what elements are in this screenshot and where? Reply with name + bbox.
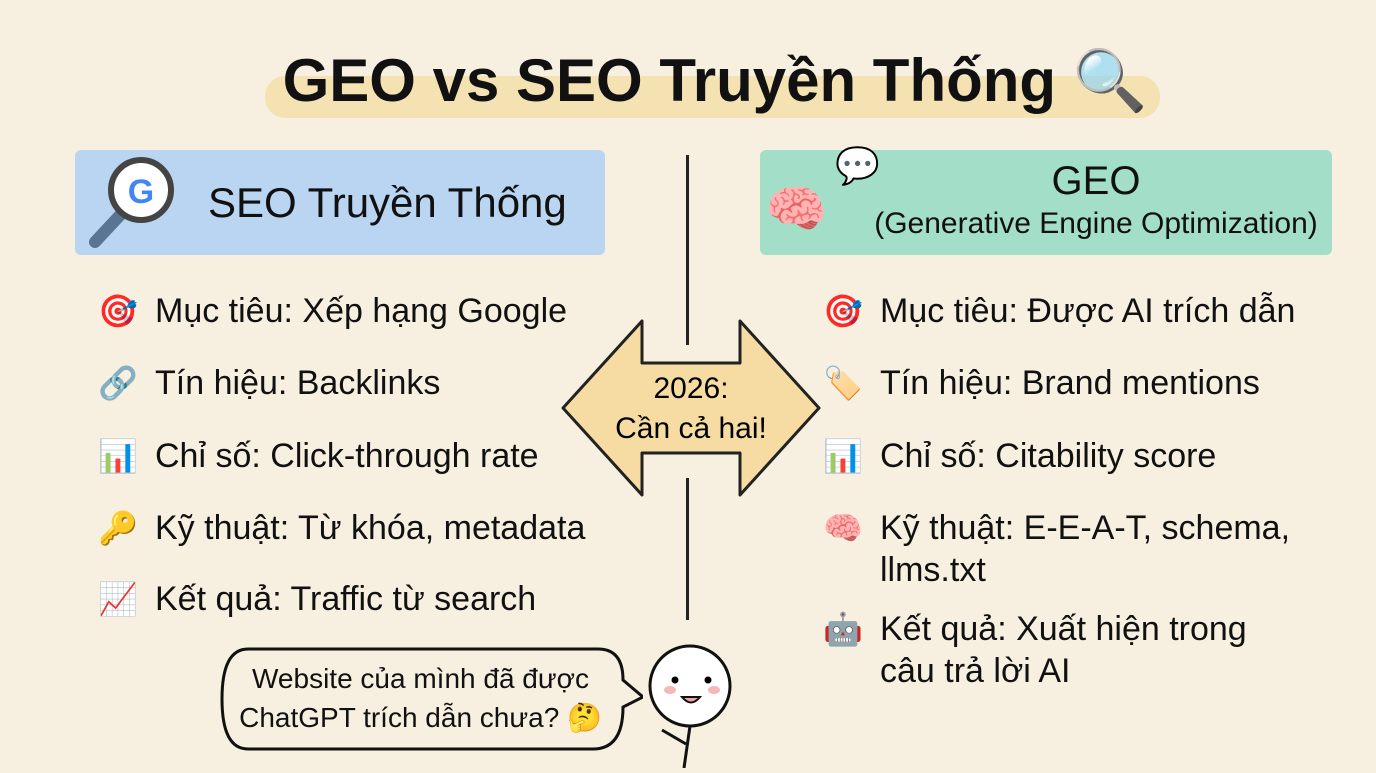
- panel header: GEO: (Generative Engine Optimization): [874, 207, 1318, 240]
- icon: magnifier G: G: [128, 173, 154, 211]
- item: 📈: [98, 581, 138, 617]
- item: 🎯: [823, 293, 863, 329]
- item: 📊: [98, 438, 138, 474]
- item: 📊: [823, 438, 863, 474]
- item: 🔗: [98, 365, 138, 401]
- item: Chỉ số: Citability score: [880, 437, 1216, 475]
- item: Mục tiêu: Được AI trích dẫn: [880, 292, 1295, 330]
- arrow: center double arrow: [561, 319, 820, 497]
- item: 🔑: [98, 510, 138, 546]
- icon: magnifier G: [89, 157, 174, 248]
- panel header: GEO: [760, 150, 1332, 255]
- character: stick figure: [648, 644, 732, 768]
- callout: speech bubble: ChatGPT trích dẫn chưa? 🤔: [239, 702, 602, 733]
- item: Kỹ thuật: E-E-A-T, schema,: [880, 509, 1290, 547]
- item: 🎯: [98, 293, 138, 329]
- divider line: [686, 155, 689, 345]
- item: Tín hiệu: Backlinks: [155, 364, 440, 402]
- callout: speech bubble: [220, 648, 643, 750]
- callout: speech bubble: Website của mình đã được: [252, 663, 589, 694]
- icon: robot brain: [765, 145, 880, 237]
- arrow: center double arrow: Cần cả hai!: [615, 412, 767, 445]
- item: Kết quả: Xuất hiện trong: [880, 610, 1247, 648]
- item: Tín hiệu: Brand mentions: [880, 364, 1260, 402]
- item: 🧠: [823, 510, 863, 546]
- icon: robot brain: 🧠: [765, 181, 827, 237]
- item: Mục tiêu: Xếp hạng Google: [155, 292, 567, 330]
- item: Kỹ thuật: Từ khóa, metadata: [155, 509, 585, 547]
- panel header: SEO: SEO Truyền Thống: [208, 179, 567, 226]
- item: 🤖: [823, 611, 863, 647]
- item: Kết quả: Traffic từ search: [155, 580, 536, 618]
- list: GEO: [823, 292, 1295, 690]
- item: 🏷️: [823, 365, 863, 401]
- item: [823, 610, 1247, 690]
- panel header: SEO: [75, 150, 605, 255]
- panel header: GEO: GEO: [1052, 159, 1140, 203]
- item: llms.txt: [880, 551, 986, 589]
- item: Chỉ số: Click-through rate: [155, 437, 539, 475]
- item: [823, 509, 1290, 589]
- item: câu trả lời AI: [880, 652, 1070, 690]
- icon: robot brain: 💬: [835, 145, 880, 186]
- arrow: center double arrow: 2026:: [653, 372, 729, 405]
- list: SEO: [98, 292, 586, 618]
- title: GEO vs SEO Truyền Thống 🔍: [283, 47, 1147, 114]
